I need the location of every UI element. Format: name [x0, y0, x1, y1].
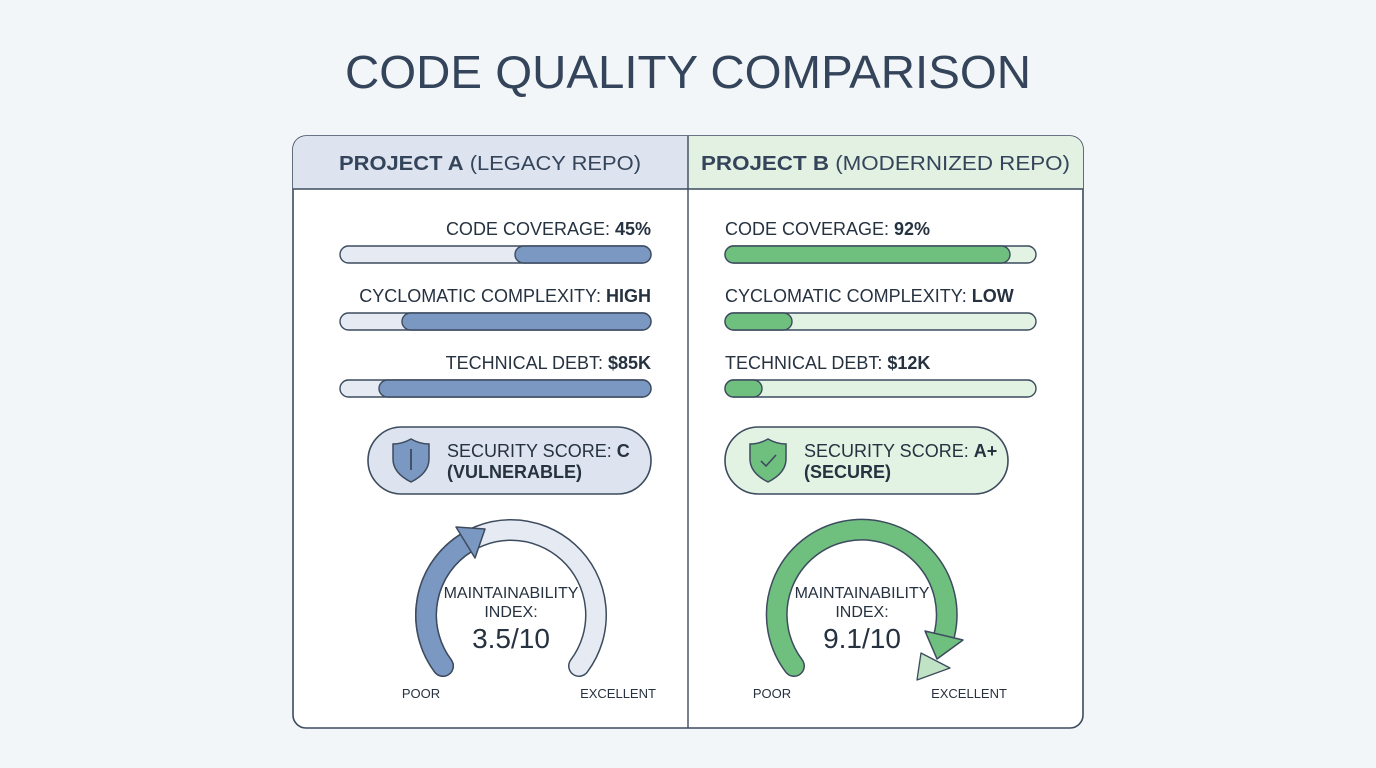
metric: code coverage A: CODE COVERAGE: 45%: [446, 219, 651, 239]
gauge B: MAINTAINABILITY: [795, 585, 930, 602]
security pill B: (SECURE): [804, 462, 891, 482]
gauge A: EXCELLENT: [580, 686, 656, 701]
metric: complexity A: [340, 286, 651, 330]
gauge A: 3.5/10: [472, 623, 550, 654]
security pill A: (VULNERABLE): [447, 462, 582, 482]
gauge A: INDEX:: [484, 604, 538, 621]
arrow: gauge B light pointer: [917, 653, 950, 680]
security pill B: [725, 427, 1008, 494]
metric: complexity A: CYCLOMATIC COMPLEXITY: HIGH: [359, 286, 651, 306]
header: project A: PROJECT A (LEGACY REPO): [339, 153, 641, 175]
metric: code coverage B: CODE COVERAGE: 92%: [725, 219, 930, 239]
panel A metrics: [340, 219, 651, 397]
panel B metrics: [725, 219, 1036, 397]
gauge A: MAINTAINABILITY: [444, 585, 579, 602]
metric: code coverage B: [725, 219, 1036, 263]
metric: code coverage A: [340, 219, 651, 263]
metric: debt A: TECHNICAL DEBT: $85K: [446, 353, 651, 373]
header: project B: PROJECT B (MODERNIZED REPO): [701, 153, 1070, 175]
header: project B: [688, 136, 1083, 189]
metric: debt B: [725, 353, 1036, 397]
metric: debt B: TECHNICAL DEBT: $12K: [725, 353, 930, 373]
gauge A: [402, 527, 656, 701]
metric: complexity B: [725, 286, 1036, 330]
gauge A: POOR: [402, 686, 440, 701]
gauge B: POOR: [753, 686, 791, 701]
icon: shield check B: [750, 439, 786, 482]
arrow: gauge A pointer: [456, 527, 485, 558]
title: CODE QUALITY COMPARISON: [345, 46, 1031, 98]
security pill A: SECURITY SCORE: C: [447, 441, 630, 461]
gauge B: 9.1/10: [823, 623, 901, 654]
header: project A: [293, 136, 688, 189]
arrow: gauge B pointer: [925, 631, 963, 659]
security pill B: SECURITY SCORE: A+: [804, 441, 997, 461]
metric: debt A: [340, 353, 651, 397]
metric: complexity B: CYCLOMATIC COMPLEXITY: LOW: [725, 286, 1014, 306]
gauge B: EXCELLENT: [931, 686, 1007, 701]
icon: shield A: [393, 439, 429, 482]
security pill A: [368, 427, 651, 494]
gauge B: [753, 530, 1007, 701]
gauge B: INDEX:: [835, 604, 889, 621]
panel: comparison card: [293, 136, 1083, 728]
